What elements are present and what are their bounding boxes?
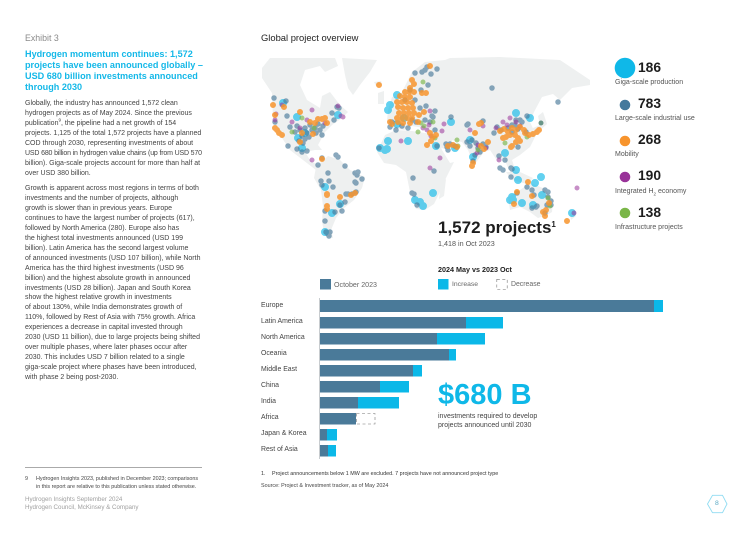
- project dots: integrated H2 economy: [275, 105, 577, 213]
- map title: Global project overview: [261, 32, 358, 43]
- legend icon: integrated: [620, 172, 630, 182]
- legend value: integrated: 190: [638, 168, 661, 183]
- bar: India: [320, 397, 399, 408]
- region label: Oceania: Oceania: [261, 350, 287, 356]
- heading: Hydrogen momentum continues: 1,572 projects have been announced globally – USD 680 billion investments announced through 2030: [25, 49, 203, 92]
- region label: Africa: Africa: [261, 414, 279, 420]
- exhibit label: Exhibit 3: [25, 33, 59, 43]
- legend caption: infrastructure: Infrastructure projects: [615, 224, 683, 231]
- legend caption: industrial: Large-scale industrial use: [615, 115, 695, 122]
- project dots: mobility: [273, 66, 567, 221]
- chart legend label: decrease: Decrease: [511, 281, 540, 288]
- legend caption: giga-scale: Giga-scale production: [615, 79, 683, 86]
- legend value: mobility: 268: [638, 132, 661, 147]
- bar: China: [320, 381, 409, 392]
- legend icon: industrial: [620, 100, 630, 110]
- map land masses: [262, 57, 590, 238]
- chart legend label: October 2023: October 2023: [334, 281, 377, 289]
- project dots: giga-scale production: [283, 95, 572, 232]
- chart legend swatch: decrease: [497, 279, 507, 290]
- region label: Latin America: Latin America: [261, 318, 303, 324]
- bar: Oceania: [320, 349, 456, 360]
- legend value: giga-scale: 186: [638, 60, 661, 75]
- region label: Rest of Asia: Rest of Asia: [261, 446, 298, 452]
- projects total: 1,572 projects1: [438, 218, 556, 237]
- chart legend swatch: October 2023: [320, 279, 331, 290]
- bar: North America: [320, 333, 485, 344]
- legend caption: mobility: Mobility: [615, 151, 639, 158]
- investment callout value: $680 B: [438, 379, 532, 411]
- region label: Europe: Europe: [261, 302, 283, 308]
- legend caption: integrated: Integrated H2 economy: [615, 188, 686, 196]
- chart footnote: 1.: [261, 471, 266, 477]
- chart footnote: [261, 471, 498, 477]
- project dots: infrastructure projects: [292, 82, 550, 206]
- region label: Japan & Korea: Japan & Korea: [261, 430, 307, 436]
- legend value: infrastructure: 138: [638, 205, 661, 220]
- chart legend label: increase: Increase: [452, 281, 478, 288]
- chart comparison title: 2024 May vs 2023 Oct: [438, 265, 512, 274]
- bar: Africa: [320, 413, 375, 424]
- projects comparison: 1,418 in Oct 2023: [438, 239, 495, 248]
- region label: India: India: [261, 398, 276, 404]
- footnote rule and footnote 9: Hydrogen Insights 2023, published in December 2023; comparisons in this report are relative to this publication unless stated otherwise.: [36, 476, 198, 490]
- footnote rule and footnote 9: 9: [25, 476, 28, 482]
- source: Source: Project & Investment tracker, as of May 2024: [261, 482, 388, 488]
- investment callout caption: investments required to develop projects announced until 2030: [438, 412, 537, 429]
- region label: Middle East: Middle East: [261, 366, 297, 372]
- region label: North America: North America: [261, 334, 305, 340]
- bar: Rest of Asia: [320, 445, 336, 456]
- body paragraph 1: Globally, the industry has announced 1,572 clean hydrogen projects as of May 2024. Since the previous publication9, the pipeline had a net growth of 154 projects. 1,125 of the total 1,572 projects have a planned COD through 2030, representing investments of about USD 680 billion in hydrogen value chains (up from USD 570 billion). Giga-scale projects account for more than half at over USD 380 billion.: [25, 100, 202, 177]
- legend icon: infrastructure: [620, 208, 630, 218]
- page number hexagon: [708, 495, 727, 513]
- region label: China: China: [261, 382, 279, 388]
- footnote rule and footnote 9: [25, 466, 202, 498]
- text: Project announcements below 1 MW are excluded. 7 projects have not announced project type: [272, 471, 498, 477]
- body paragraph 2: Growth is apparent across most regions in terms of both investments and the number of projects, although growth is slower than in previous years. Europe continues to have the largest number of projects (617), followed by North America (280). Europe also has the highest total investments announced (USD 199 billion). Latin America has the second largest volume of announced investments (USD 107 billion), while North America has the third highest investments (USD 96 billion) and the highest absolute growth in announced investments (USD 28 billion). Japan and South Korea show the highest relative growth in investments of about 130%, while India demonstrates growth of 110%, followed by Rest of Asia with 75% growth. Africa experiences a decrease in capital invested through 2030 (USD 11 billion), due to large projects being shifted over multiple phases, where later phases occur after 2030. This includes USD 7 billion related to a single giga-scale project where phases have been introduced, with phase 2 being post-2030.: [25, 185, 200, 381]
- bar: Latin America: [320, 317, 503, 328]
- page number: 8: [715, 500, 719, 507]
- legend icon: mobility: [620, 136, 630, 146]
- legend icon: giga-scale: [615, 58, 635, 78]
- bar chart axis: [319, 298, 320, 459]
- bar: Japan & Korea: [320, 429, 337, 440]
- bar: Europe: [320, 300, 663, 312]
- bar: Middle East: [320, 365, 422, 376]
- project dots: large-scale industrial use: [274, 67, 558, 236]
- publication footer: Hydrogen Insights September 2024 Hydrogen Council, McKinsey & Company: [25, 496, 138, 511]
- legend value: industrial: 783: [638, 96, 661, 111]
- chart legend swatch: increase: [438, 279, 448, 290]
- bar chart: [319, 298, 663, 459]
